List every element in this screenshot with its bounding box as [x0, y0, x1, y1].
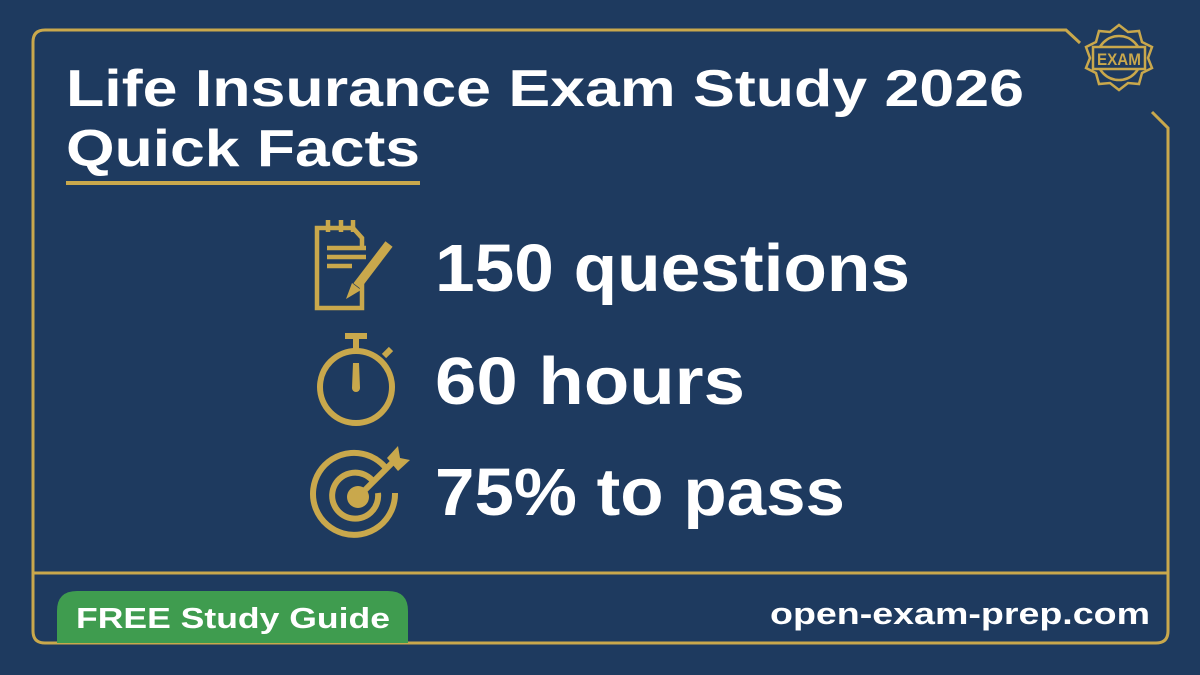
icon: notepad	[317, 220, 389, 308]
title	[66, 60, 1024, 178]
fact: hours	[320, 336, 745, 423]
icon: target	[313, 453, 395, 535]
fact: pass	[313, 446, 845, 535]
footer url: open-exam-prep.com	[770, 596, 1150, 631]
icon: exam badge: EXAM	[1097, 50, 1141, 69]
title underline	[66, 181, 420, 185]
fact: hours: 60 hours	[435, 344, 745, 419]
fact: questions	[317, 220, 910, 308]
title: Quick Facts	[66, 120, 420, 178]
fact: pass: 75% to pass	[435, 455, 845, 530]
fact: questions: 150 questions	[435, 231, 910, 306]
badge: free study guide: FREE Study Guide	[76, 603, 390, 635]
title: Life Insurance Exam Study 2026	[66, 60, 1024, 118]
badge: free study guide	[57, 591, 408, 643]
icon: exam badge	[1086, 25, 1152, 90]
icon: stopwatch	[320, 336, 392, 423]
